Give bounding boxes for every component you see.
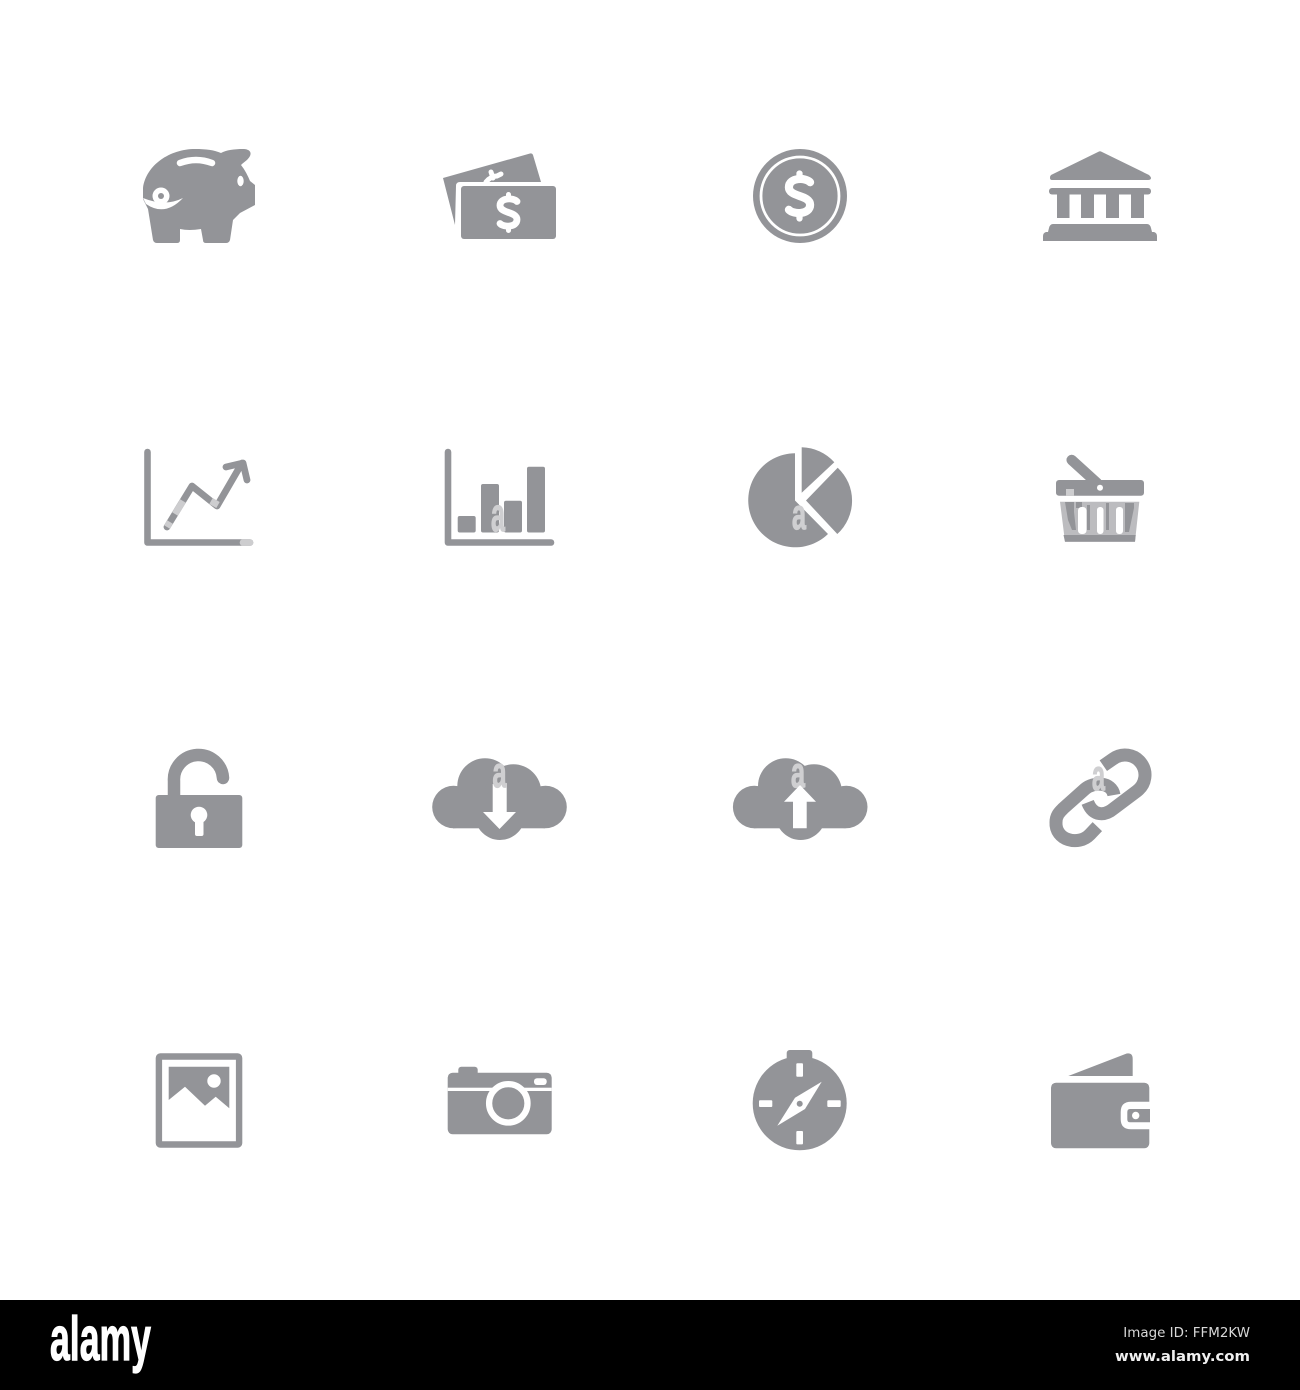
icon: camera	[448, 1067, 552, 1134]
icon: chain link	[1056, 752, 1145, 841]
icon: pie chart	[748, 447, 852, 547]
icon: cloud upload	[733, 749, 868, 840]
icon: cloud download	[432, 749, 567, 840]
icon: chain link: a	[1092, 752, 1106, 800]
icon: wallet	[1051, 1053, 1150, 1148]
icon: bar chart: a	[491, 488, 505, 541]
icon: shopping basket	[1056, 460, 1144, 542]
icon: picture frame	[159, 1056, 239, 1144]
website: www.alamy.com	[1115, 1349, 1250, 1365]
icon: dollar coin	[753, 149, 847, 243]
icon: compass	[753, 1050, 847, 1150]
icon: piggy bank	[143, 149, 255, 243]
icon: pie chart: a	[792, 491, 807, 539]
icon: cloud download: a	[492, 749, 507, 797]
image id: Image ID: FFM2KW	[1123, 1325, 1250, 1341]
footer bar	[0, 1300, 1300, 1390]
icon: banknotes	[443, 153, 556, 239]
icon: cloud upload: a	[791, 749, 806, 797]
icon: bar chart	[448, 452, 551, 542]
icon: open padlock	[156, 755, 242, 848]
logo: alamy: alamy	[50, 1305, 151, 1374]
icon: bank building	[1043, 151, 1157, 241]
icon: line chart	[148, 452, 250, 542]
